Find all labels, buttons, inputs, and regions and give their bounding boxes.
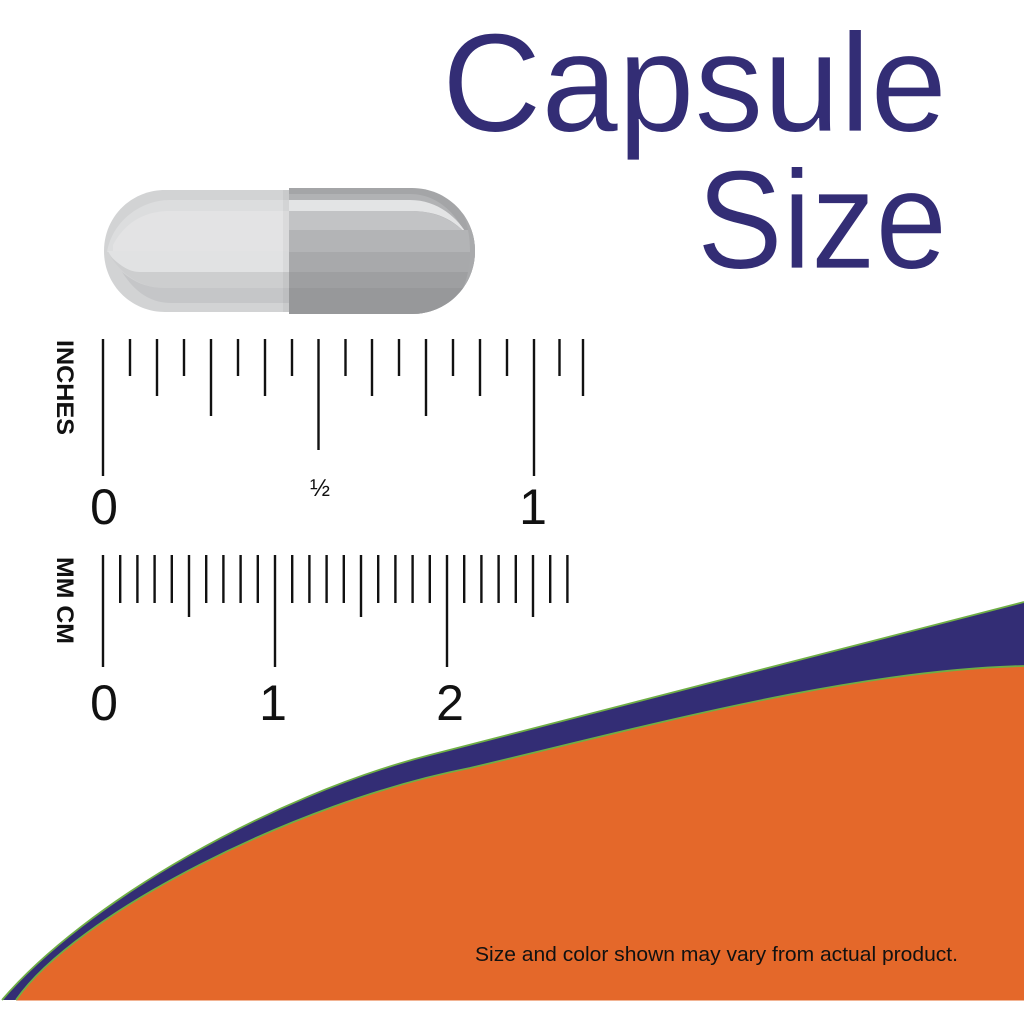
capsule left half: [100, 188, 290, 314]
centimetre ruler numbers: 0: [90, 675, 118, 731]
inches label: INCHES: [51, 340, 78, 435]
centimetre ruler numbers: 2: [436, 675, 464, 731]
disclaimer: Size and color shown may vary from actual product.: [475, 944, 958, 966]
mm cm label: MM CM: [51, 557, 78, 644]
navy swoosh: [2, 602, 1024, 1000]
centimetre ruler numbers: [90, 675, 464, 731]
inches ruler numbers: 0: [90, 479, 118, 535]
inches ruler numbers: [90, 475, 547, 535]
centimetre ruler ticks: [103, 555, 567, 667]
capsule illustration: [100, 186, 477, 316]
title: Capsule: [442, 4, 947, 161]
capsule right half: [285, 186, 477, 316]
inches ruler numbers: ½: [310, 475, 330, 502]
title: [442, 4, 947, 298]
inches ruler numbers: 1: [519, 479, 547, 535]
centimetre ruler numbers: 1: [259, 675, 287, 731]
orange swoosh: [16, 666, 1024, 1000]
title: Size: [697, 141, 947, 298]
inches ruler ticks: [103, 339, 583, 476]
